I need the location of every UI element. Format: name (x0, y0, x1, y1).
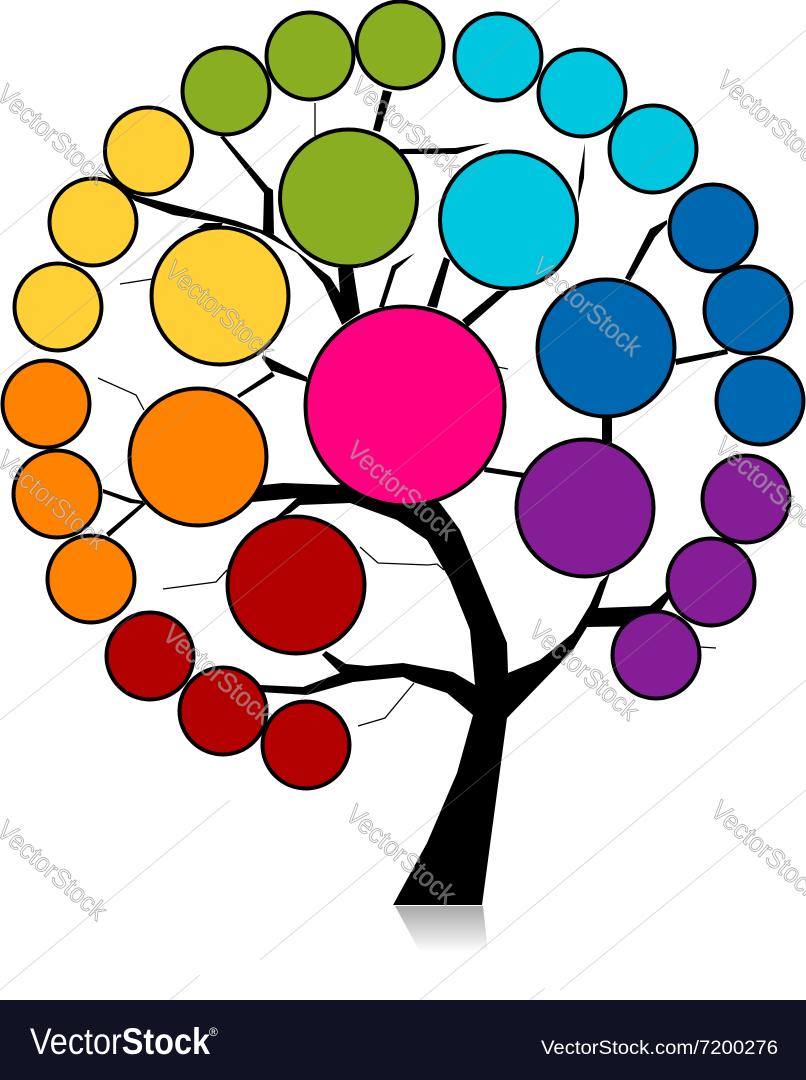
watermarks: VectorStock (341, 435, 463, 546)
central pink circle (306, 306, 504, 506)
trunk with main limbs (252, 470, 672, 905)
trunk reflection (395, 906, 488, 952)
watermarks: VectorStock (526, 251, 648, 362)
circles: cyan group (440, 14, 696, 288)
brand logo: VectorStock (30, 1021, 210, 1062)
watermarks: VectorStock (340, 799, 462, 910)
watermarks: VectorStock (345, 71, 467, 182)
side branches (103, 90, 728, 537)
circles: yellow group (14, 108, 288, 364)
image id: VectorStock.com/7200276 (541, 1038, 778, 1059)
registered mark: ® (209, 1025, 218, 1039)
circles: olive group (182, 2, 444, 266)
tree trunk and branches (97, 90, 728, 905)
footer bar (0, 1000, 806, 1080)
upper limbs (97, 168, 360, 325)
circles: blue group (538, 184, 804, 444)
circles: orange group (2, 360, 266, 622)
watermarks: VectorStock (157, 619, 279, 730)
thin twigs (98, 103, 716, 726)
circles: purple group (516, 440, 790, 698)
circles: red group (106, 516, 364, 788)
watermarks: VectorStock (159, 255, 281, 366)
watermarks: VectorStock (523, 615, 645, 726)
watermarks (0, 65, 806, 926)
